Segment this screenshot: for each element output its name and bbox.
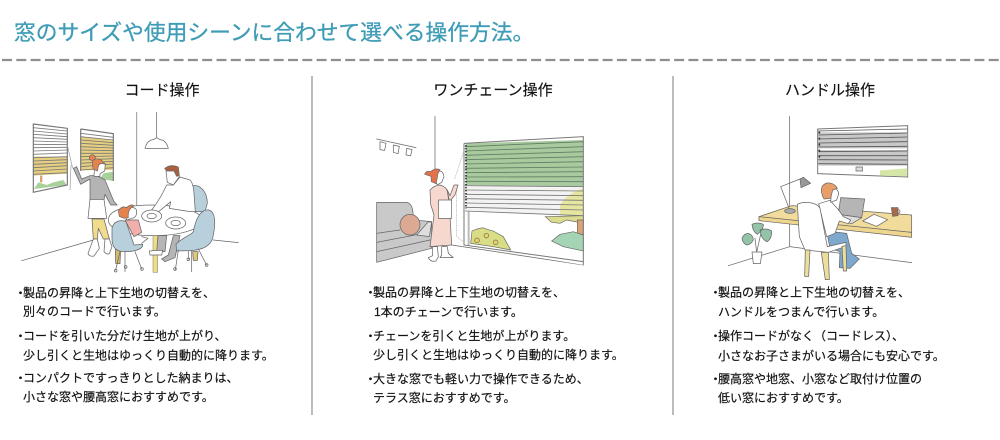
text: handle operation points: 小さなお子さまがいる場合にも安心です。	[718, 348, 945, 363]
panel: handle operation	[710, 82, 945, 405]
plant	[755, 230, 762, 252]
text: handle operation points: ハンドルをつまんで行います。	[718, 305, 884, 319]
woman	[430, 185, 452, 247]
text: cord operation points: ・	[14, 286, 27, 300]
text: handle operation points: ・	[710, 286, 722, 300]
text: cord operation points: コンパクトですっきりとした納まりは、	[23, 370, 239, 385]
spotlight rail	[377, 139, 416, 148]
text: one-chain operation points: ・	[364, 372, 377, 386]
text: cord operation points	[14, 286, 274, 404]
illustration: family at table with cord blinds	[22, 112, 238, 272]
window	[464, 137, 583, 265]
person	[827, 231, 859, 268]
heading: one-chain operation: ワンチェーン操作	[433, 82, 553, 99]
text: cord operation points: 別々のコードで行います。	[23, 304, 166, 318]
text: handle operation points	[710, 286, 945, 405]
text: one-chain operation points: 大きな窓でも軽い力で操作できるため、	[373, 371, 589, 386]
window 1	[33, 173, 67, 192]
window	[818, 126, 908, 177]
laptop	[838, 198, 865, 218]
text: cord operation points: 少し引くと生地はゆっくり自動的に降ります。	[23, 348, 274, 362]
desk	[759, 206, 912, 232]
text: handle operation points: 腰高窓や地窓、小窓など取付け位置の	[718, 372, 922, 386]
chair	[797, 202, 846, 252]
text: cord operation points: ・	[14, 371, 27, 385]
illustration: woman at desk with handle blind	[728, 116, 912, 280]
heading: cord operation: コード操作	[124, 82, 200, 99]
table	[108, 205, 203, 236]
panel: cord operation	[14, 82, 274, 404]
text: handle operation points: 低い窓におすすめです。	[718, 391, 849, 405]
text: one-chain operation points: テラス窓におすすめです。	[373, 391, 516, 405]
text: handle operation points: ・	[710, 372, 722, 386]
panel: one-chain operation	[364, 82, 624, 405]
text: cord operation points: 製品の昇降と上下生地の切替えを、	[23, 286, 215, 300]
text: cord operation points: 小さな窓や腰高窓におすすめです。	[23, 390, 214, 404]
text: cord operation points: ・	[14, 329, 27, 343]
sofa	[377, 202, 432, 262]
text: handle operation points: 操作コードがなく（コードレス）、	[718, 328, 904, 343]
chairs	[176, 210, 215, 251]
text: handle operation points: ・	[710, 329, 722, 343]
text: one-chain operation points: ・	[364, 329, 377, 343]
text: one-chain operation points	[364, 286, 624, 405]
text: one-chain operation points: チェーンを引くと生地が上がります。	[373, 328, 575, 343]
paper and mug	[863, 214, 888, 226]
text: one-chain operation points: ・	[364, 286, 377, 300]
window 2	[81, 129, 113, 181]
title: 窓のサイズや使用シーンに合わせて選べる操作方法。	[14, 20, 534, 45]
lamp	[781, 179, 800, 209]
text: one-chain operation points: 1本のチェーンで行います。	[374, 305, 523, 319]
child	[125, 220, 142, 237]
heading: handle operation: ハンドル操作	[785, 82, 875, 99]
text: one-chain operation points: 少し引くと生地はゆっくり自動的に降ります。	[373, 347, 624, 362]
man	[193, 186, 207, 212]
text: one-chain operation points: 製品の昇降と上下生地の切替えを、	[373, 286, 565, 300]
text: cord operation points: コードを引いた分だけ生地が上がり、	[23, 328, 227, 343]
woman	[73, 167, 117, 205]
text: handle operation points: 製品の昇降と上下生地の切替えを、	[718, 286, 910, 300]
illustration: woman at large chain blind	[377, 116, 583, 265]
